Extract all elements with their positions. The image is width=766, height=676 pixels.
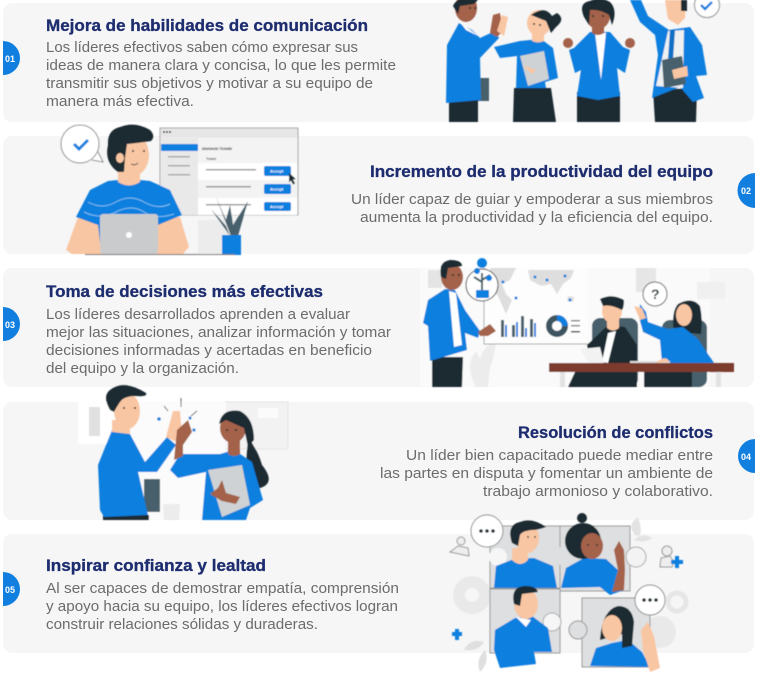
text block: del equipo y la organización. [46,361,239,377]
icon: user outline right [660,546,674,567]
text block: mejor las situaciones, analizar información y tomar [46,325,391,341]
panel: decisiones [3,258,754,387]
man in blue [98,385,182,520]
table [549,363,734,372]
puzzle piece: top right [553,513,646,595]
text block: las partes en disputa y fomentar un ambiente de [380,466,713,482]
icon: plus left [452,629,462,640]
number badge 05 [3,572,20,606]
number badge 02: 02 [741,186,751,196]
text block: aumenta la productividad y la eficiencia del equipo. [360,210,713,226]
illustration: high five [78,385,288,520]
app window: MANAGE TEAMS [202,146,232,151]
seated man [568,296,638,387]
plant and pot [198,197,248,255]
heading: Inspirar confianza y lealtad [46,557,266,575]
speech bubble: right [635,585,665,615]
person: man high five [446,0,508,122]
text block: Al ser capaces de demostrar empatía, comprensión [46,581,399,597]
text block: trabajo armonioso y colaborativo. [483,484,713,500]
illustration: puzzle team [450,513,686,672]
text block [46,581,399,633]
woman in blue [170,411,269,520]
number badge 05: 05 [5,585,15,595]
panel: conflictos [3,385,755,520]
text block: Los líderes efectivos saben cómo expresar sus [46,40,358,56]
person: woman with tablet [494,10,561,122]
person: woman in blazer [563,0,635,122]
heading: Toma de decisiones más efectivas [46,283,323,301]
person: man raising hand [630,0,720,122]
puzzle piece: bottom right [569,598,660,672]
illustration: boardroom presentation [420,258,734,387]
text block: y apoyo hacia su equipo, los líderes efectivos logran [46,599,398,615]
icon: check badge [694,0,720,18]
heading: Resolución de conflictos [518,424,713,442]
app window: Accept [270,168,284,174]
icon: user outline left [450,537,469,556]
number badge 01: 01 [5,54,15,64]
office backdrop [78,402,288,520]
panel: comunicación [3,0,754,122]
panel: confianza [3,513,754,672]
icon: question bubble: ? [651,286,660,302]
text block [380,448,713,500]
text block: decisiones informadas y acertadas en beneficio [46,343,372,359]
heading: Mejora de habilidades de comunicación [46,17,368,35]
text block: manera más efectiva. [46,94,194,110]
number badge 04: 04 [741,452,751,462]
number badge 02 [738,173,755,208]
app window: Accept [270,204,284,209]
text block: Un líder bien capacitado puede mediar entre [406,448,713,464]
number badge 03 [3,307,20,341]
heading: Incremento de la productividad del equipo [370,163,713,181]
speech bubble: left [471,515,503,547]
text block [351,192,713,226]
presentation board with map and charts [484,268,588,344]
text block [46,40,396,110]
sparkle accents [157,398,197,432]
number badge 03: 03 [5,320,15,330]
text block: transmitir sus objetivos y motivar a su equipo de [46,76,373,92]
puzzle piece: top left [489,520,560,588]
number badge 01 [3,41,20,75]
text block: Un líder capaz de guiar y empoderar a sus miembros [351,192,713,208]
illustration: team celebrating [446,0,720,122]
speech bubble with check [61,125,103,163]
text block: ideas de manera clara y concisa, lo que les permite [46,58,396,74]
panel: productividad [3,125,755,255]
text block: construir relaciones sólidas y duraderas. [46,617,318,633]
man [66,125,235,255]
text block: Los líderes desarrollados aprenden a evaluar [46,307,350,323]
number badge 04 [738,439,755,473]
presenter [423,260,496,387]
icon: plus right [671,556,683,568]
background gears and leaves [453,517,686,672]
puzzle piece: bottom left [490,586,561,668]
room backdrop [420,268,725,387]
seated woman [630,282,714,387]
app window: Accept [270,186,284,192]
icon: plant bubble [466,258,498,301]
app window [160,128,298,215]
app window: Team [206,156,217,161]
text block [46,307,391,377]
illustration: man at laptop [61,125,298,255]
